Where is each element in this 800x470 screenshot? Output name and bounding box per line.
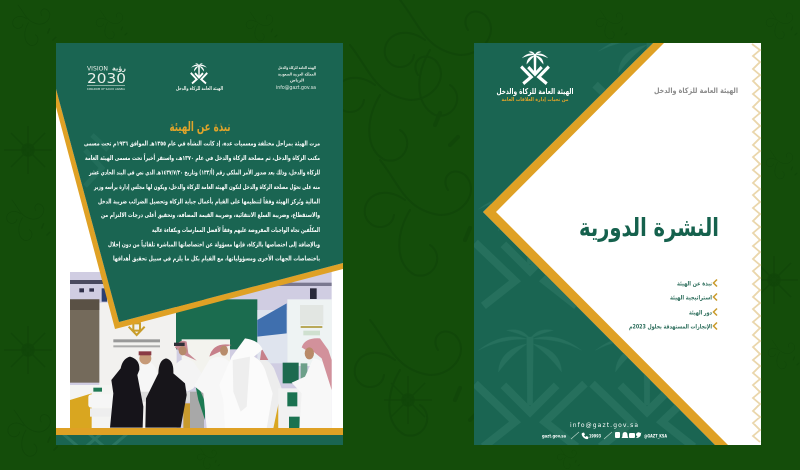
body text: وبالإضافة إلى اختصاصها بالزكاة، فإنها مسؤولة عن اختصاصاتها المباشرة تلقائياً من دون إخلال — [108, 239, 320, 248]
list item 1: نبذة عن الهيئة — [677, 280, 712, 288]
authority name: الهيئة العامة للزكاة والدخل — [176, 86, 223, 92]
bottom green strip — [56, 435, 343, 445]
vision 2030 logo: 2030 — [87, 72, 126, 87]
contact block: المملكة العربية السعودية — [278, 72, 316, 76]
body text: باختصاصات الجهات الأخرى ومسؤولياتها، مع القيام بكل ما يلزم في سبيل تحقيق أهدافها — [113, 254, 320, 262]
footer contacts: 19993 — [589, 434, 601, 438]
body text: منه على تحوّل مصلحة الزكاة والدخل لتكون الهيئة العامة للزكاة والدخل، ويكون لها مجلس إدارة يرأسه وزير — [93, 182, 320, 191]
body text: للزكاة والدخل، وذلك بعد صدور الأمر الملكي رقم (أ/١٣٣) وتاريخ ١٤٣٧/٧/٣٠هـ الذي نص في البند الحادي عشر — [88, 168, 320, 176]
icon: authority logo on cover — [521, 51, 549, 84]
pedestal — [278, 363, 307, 428]
bottom gold strip — [56, 428, 343, 435]
gold frame of the green panel — [56, 89, 343, 329]
person: woman in abaya, second — [145, 358, 187, 428]
list item 2: استراتيجية الهيئة — [670, 294, 712, 302]
person: man with red headdress at right — [292, 338, 332, 428]
person: man in back — [259, 350, 282, 428]
body text: المكلّفين تجاه الواجبات المفروضة عليهم وفقاً لأفضل الممارسات وبكفاءة عالية — [152, 225, 320, 234]
cover title: النشرة الدورية — [579, 213, 719, 243]
body text — [84, 138, 320, 262]
watermark — [85, 135, 108, 186]
body text: مكتب الزكاة والدخل، ثم مصلحة الزكاة والدخل في عام ١٣٧٠هـ، واستقر أخيراً تحت مسمى الهيئة العامة — [85, 153, 320, 162]
body text: المالية وتُركز الهيئة وفقاً لتنظيمها على القيام بأعمال جباية الزكاة وتحصيل الضرائب ضريبة الدخل — [98, 196, 320, 206]
icon: authority logo — [191, 63, 207, 83]
panel: cover page — [474, 31, 761, 447]
vision 2030 logo: KINGDOM OF SAUDI ARABIA — [87, 87, 126, 91]
person: man in white from behind — [226, 338, 272, 428]
zigzag border — [752, 44, 760, 442]
icon: phone — [582, 432, 588, 439]
icons: social media — [615, 432, 642, 438]
vision 2030 logo: VISION — [87, 66, 108, 72]
top right authority name: الهيئة العامة للزكاة والدخل — [654, 86, 738, 95]
list item 4: الإنجازات المستهدفة بحلول 2023م — [629, 324, 712, 330]
footer contacts — [542, 432, 668, 439]
footer contacts: @GAZT_KSA — [644, 434, 668, 438]
vision 2030 logo — [87, 64, 126, 91]
contact email: info@gazt.gov.sa — [570, 422, 638, 429]
watermark logos — [475, 31, 705, 447]
cover tagline: من تحيات إدارة العلاقات العامة — [502, 97, 568, 103]
body text: والاستقطاع، وضريبة السلع الانتقائية، وضريبة القيمة المضافة، وتحقيق أعلى درجات الالتزام من — [101, 210, 320, 219]
body text: مرت الهيئة بمراحل مختلفة ومسميات عدة، إذ كانت النشأة في عام ١٣٥٥هـ الموافق ١٩٣٦م تحت مسمى — [84, 138, 320, 148]
footer contacts: gazt.gov.sa — [542, 434, 566, 438]
gold chevron band — [483, 43, 728, 445]
person: man in white behind counter — [138, 351, 152, 364]
photo: exhibition stand — [70, 272, 332, 429]
vision 2030 logo: رؤية — [112, 64, 126, 72]
person: woman in abaya — [110, 357, 143, 428]
person: man in red headdress — [174, 340, 198, 392]
person: man in white thobe — [194, 344, 232, 428]
contact block — [276, 65, 316, 91]
green chevron panel — [474, 43, 715, 445]
contents list — [629, 280, 717, 330]
green panel — [56, 43, 343, 322]
contact block: الهيئة العامة للزكاة والدخل — [278, 65, 316, 70]
cover authority name: الهيئة العامة للزكاة والدخل — [496, 87, 574, 96]
panel: about page — [56, 43, 343, 450]
heading: about: نبذة عن الهيئة — [170, 120, 230, 135]
contact block: info@gazt.gov.sa — [276, 85, 316, 91]
list item 3: دور الهيئة — [689, 310, 712, 316]
contact block: الرياض — [290, 78, 305, 82]
